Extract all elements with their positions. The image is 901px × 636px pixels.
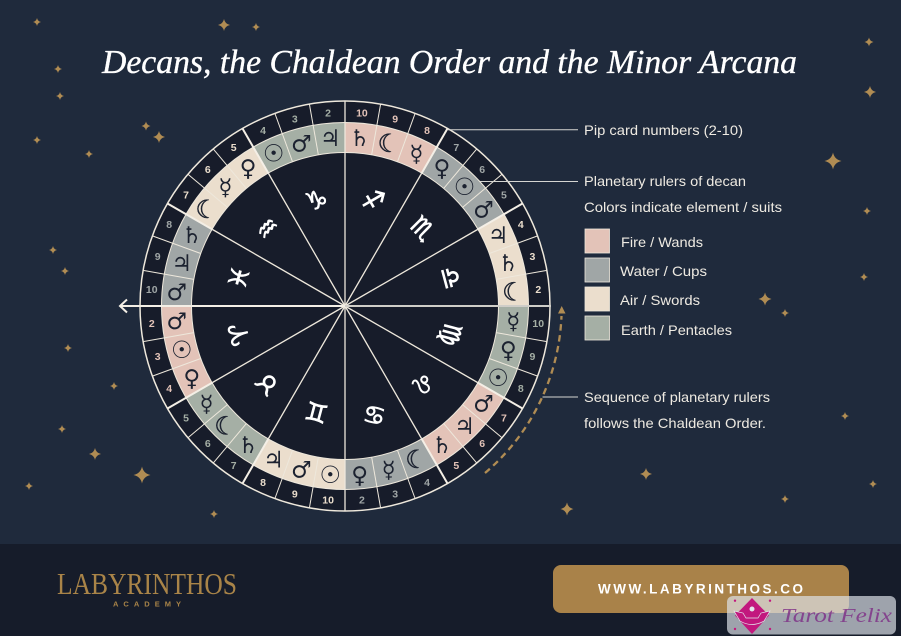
- sector: Cancer / water: 2: [359, 494, 365, 506]
- button: website: [553, 565, 849, 613]
- footer band: [0, 544, 901, 636]
- sector: Capricorn / earth: ♂: [291, 131, 312, 157]
- sector: Taurus / earth: 5: [183, 412, 189, 424]
- callout: Chaldean sequence: Sequence of planetary rulers: [584, 389, 770, 405]
- sector: Scorpio / water: 5: [501, 190, 507, 202]
- sector: Taurus / earth: 6: [205, 438, 211, 450]
- sector: Cancer / water: ♋︎: [361, 398, 388, 431]
- sector: Gemini / air: ♃: [263, 448, 284, 474]
- legend item: fire: Fire / Wands: [621, 234, 703, 250]
- sector: Libra / air: 2: [535, 284, 541, 296]
- legend item: water: Water / Cups: [620, 263, 707, 279]
- arrow: Chaldean order direction: [485, 306, 566, 473]
- sector: Gemini / air: ☉: [320, 461, 341, 489]
- callout: Chaldean sequence: [542, 389, 770, 431]
- sector: Libra / air: ♃: [488, 223, 508, 249]
- sector: Aquarius / air: 7: [183, 190, 189, 202]
- sector: Gemini / air: ♊︎: [302, 395, 331, 429]
- sector: Sagittarius / fire: [349, 108, 430, 217]
- callout: planetary rulers: Planetary rulers of decan: [584, 173, 746, 189]
- legend item: earth: [585, 316, 732, 340]
- sector: Pisces / water: 8: [166, 219, 172, 231]
- wordmark: Tarot Felix: [781, 605, 892, 627]
- horizontal axis with arrow: [120, 300, 551, 312]
- sector: Leo / fire: ♃: [454, 414, 475, 440]
- callout: planetary rulers: [480, 173, 782, 215]
- sector: Virgo / earth: 9: [529, 351, 535, 363]
- sector: Leo / fire: ♌︎: [404, 365, 441, 402]
- callout: Chaldean sequence: follows the Chaldean Order.: [584, 415, 766, 431]
- sector: Taurus / earth: ♄: [238, 433, 258, 459]
- sector: Capricorn / earth: 3: [292, 114, 298, 126]
- watermark: Tarot Felix: [727, 596, 896, 634]
- callout: pip card numbers: Pip card numbers (2-10): [584, 122, 743, 138]
- sector: Libra / air: ♄: [498, 251, 519, 277]
- sector: Aquarius / air: 5: [231, 142, 237, 154]
- sector: Cancer / water: ☾: [405, 445, 428, 474]
- sector: Leo / fire: 6: [479, 438, 485, 450]
- sector: Taurus / earth: ☿: [200, 391, 214, 417]
- sector: Aries / fire: ♈︎: [222, 320, 256, 349]
- wheel base: [140, 101, 550, 511]
- sector: Sagittarius / fire: 10: [356, 108, 368, 120]
- zodiac wheel: [120, 101, 551, 511]
- sector: Virgo / earth: ♀: [500, 338, 517, 364]
- legend item: earth: Earth / Pentacles: [621, 322, 732, 338]
- sector: Scorpio / water: 7: [453, 142, 459, 154]
- sector: Pisces / water: ♃: [171, 251, 192, 277]
- logo: Labyrinthos Academy: ACADEMY: [113, 600, 181, 608]
- sector: Leo / fire: [404, 365, 507, 472]
- sector: Aries / fire: ♂: [166, 309, 187, 335]
- sector: Leo / fire: 7: [501, 412, 507, 424]
- sector: Virgo / earth: 10: [532, 318, 544, 330]
- sector: Scorpio / water: ♂: [473, 198, 494, 224]
- sector: Virgo / earth: ☿: [506, 309, 520, 335]
- sector: Leo / fire: ♂: [473, 391, 494, 417]
- sector: Aquarius / air: ☿: [218, 175, 233, 201]
- sector: Libra / air: [434, 219, 541, 306]
- sector: Cancer / water: ☿: [382, 458, 396, 484]
- sector: Aries / fire: 3: [155, 351, 161, 363]
- sector: Libra / air: 4: [518, 219, 524, 231]
- sector: Taurus / earth: ♉︎: [249, 365, 286, 402]
- sector: Gemini / air: 8: [260, 477, 266, 489]
- sector: Sagittarius / fire: ♄: [349, 126, 370, 152]
- sector: Aries / fire: [149, 309, 256, 395]
- sector: Libra / air: ♎︎: [434, 263, 468, 292]
- sector: Cancer / water: 4: [424, 477, 430, 489]
- sector: Gemini / air: 9: [292, 488, 298, 500]
- sector: Scorpio / water: [404, 142, 507, 247]
- sector: Aquarius / air: [183, 142, 286, 247]
- legend item: air: [585, 287, 700, 311]
- sector: Libra / air: ☾: [502, 277, 525, 306]
- sector: Sagittarius / fire: ☿: [409, 141, 423, 167]
- sector: Sagittarius / fire: 8: [424, 125, 430, 137]
- sector: Aries / fire: 2: [149, 318, 155, 330]
- major number dividers: [167, 128, 523, 484]
- sector: Capricorn / earth: 2: [325, 108, 331, 120]
- legend item: water: [585, 258, 707, 282]
- sector: Virgo / earth: ☉: [487, 364, 509, 392]
- sector: Virgo / earth: [434, 309, 544, 395]
- decan dividers: [143, 104, 547, 508]
- legend item: air: Air / Swords: [620, 292, 700, 308]
- sector: Pisces / water: [146, 219, 256, 306]
- sector: Leo / fire: ♄: [432, 433, 452, 459]
- sector: Scorpio / water: ♀: [434, 156, 450, 182]
- sector: Aries / fire: 4: [166, 383, 172, 395]
- legend: elements and suits: [585, 229, 732, 340]
- sector: Leo / fire: 5: [453, 460, 459, 472]
- sector: Pisces / water: 10: [146, 284, 158, 296]
- sector: Virgo / earth: 8: [518, 383, 524, 395]
- sector: Capricorn / earth: ☉: [263, 139, 284, 167]
- sector: Capricorn / earth: [260, 108, 341, 217]
- sector: Capricorn / earth: ♃: [320, 126, 341, 152]
- sector: Aquarius / air: 6: [205, 164, 211, 176]
- sector: Libra / air: 3: [529, 251, 535, 263]
- sector: Taurus / earth: ☾: [214, 412, 237, 441]
- callout: planetary rulers: Colors indicate element / suits: [584, 199, 782, 215]
- sector: Capricorn / earth: 4: [260, 125, 266, 137]
- sector: Gemini / air: [260, 395, 341, 506]
- legend item: fire: [585, 229, 703, 253]
- sector: Aquarius / air: ☾: [195, 195, 218, 224]
- sector: Gemini / air: ♂: [291, 458, 312, 484]
- sector: Aries / fire: ☉: [171, 336, 193, 364]
- sector: Virgo / earth: ♍︎: [434, 320, 468, 349]
- sector: Cancer / water: [351, 398, 430, 506]
- sector: Aquarius / air: ♀: [240, 156, 256, 182]
- title: Decans, the Chaldean Order and the Minor Arcana: [101, 44, 797, 81]
- sector: Aries / fire: ♀: [183, 366, 200, 392]
- sector: Scorpio / water: 6: [479, 164, 485, 176]
- sector: Cancer / water: ♀: [351, 463, 368, 489]
- logo: Labyrinthos Academy: LABYRINTHOS: [57, 566, 237, 601]
- sector: Scorpio / water: ♏︎: [404, 210, 441, 247]
- sector: Sagittarius / fire: 9: [392, 114, 398, 126]
- sector: Sagittarius / fire: ☾: [378, 129, 400, 158]
- element colour ring: [140, 101, 550, 511]
- sector: Taurus / earth: 7: [231, 460, 237, 472]
- icon: magenta lotus diamond: [734, 598, 771, 634]
- sector: Gemini / air: 10: [322, 494, 334, 506]
- sector: Sagittarius / fire: ♐︎: [359, 183, 388, 217]
- button: website: WWW.LABYRINTHOS.CO: [598, 582, 803, 596]
- sector: Pisces / water: ♄: [182, 223, 202, 249]
- sector: Pisces / water: 9: [155, 251, 161, 263]
- logo: Labyrinthos Academy: [57, 566, 237, 608]
- stars: [25, 18, 877, 518]
- sector: Pisces / water: ♓︎: [222, 263, 256, 292]
- sector: Capricorn / earth: ♑︎: [302, 183, 331, 217]
- sector: Cancer / water: 3: [392, 488, 398, 500]
- sector: Scorpio / water: ☉: [454, 173, 475, 201]
- sector: Pisces / water: ♂: [166, 280, 187, 306]
- sector: Aquarius / air: ♒︎: [249, 210, 286, 247]
- sector: Taurus / earth: [183, 365, 286, 472]
- sign spokes: [212, 101, 478, 511]
